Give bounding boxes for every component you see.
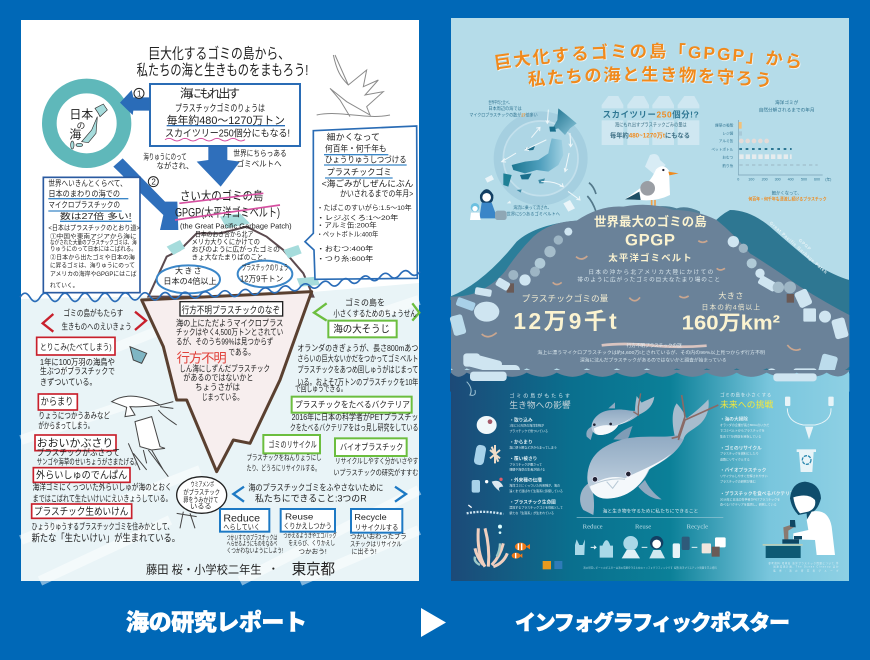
callout: decomposition years: ・ペットボトル:400年 <box>317 230 379 239</box>
section: effects on living things: とりこみ(たべてしまう) <box>40 342 112 352</box>
section: effects on living things: 珊瑚や海草の生長が妨げる <box>509 466 545 471</box>
callout: microplastics around Japan: 日本のまわりの海での <box>48 189 120 199</box>
section: effects on living things: ゴミの島がもたらす <box>63 307 124 318</box>
heading: world's largest garbage island: 帯のように広がったゴミの巨大なたまり場のこと <box>577 275 720 283</box>
text: what GPGP is: 日本のおき合から北ア <box>195 230 253 239</box>
chart: years to decompose: レジ袋 <box>722 131 734 136</box>
callout: microplastics around Japan: りゅうにのって日本にはこばれる。 <box>50 245 137 253</box>
iceberg: top <box>148 213 320 297</box>
section: challenges for the future: 道路にリサイクルする <box>720 456 750 461</box>
iceberg: underwater part with text: るが、そのうち99%は見つからず <box>176 335 274 346</box>
text: credits <box>768 561 839 572</box>
chart: years to decompose: 100 <box>748 178 754 182</box>
iceberg: underwater part with text: である。 <box>228 347 255 357</box>
section: effects on living things: 外らいしゅのでんぱん <box>36 469 127 481</box>
chart: years to decompose: 400 <box>788 178 794 182</box>
section: challenges for the future <box>247 297 419 477</box>
section: 3R icons: 海の研究レポートのポスターは海の環境を守るためのインフォグラフィックです 協賛:海洋プラスチック問題を学ぶ資料 <box>583 566 717 570</box>
debris along slopes <box>449 228 849 384</box>
callout: microplastics around Japan <box>43 177 140 293</box>
section: 3R: Reuse <box>285 511 314 521</box>
callout: decomposition years: 細かくなって <box>327 131 380 142</box>
section: effects on living things: ・取り込み <box>509 416 533 423</box>
label: Great Pacific Garbage Patch: GPGP <box>798 238 812 252</box>
panel: infographic poster <box>450 18 850 581</box>
text: skytree amount: 海にもれ出すプラスチックごみの量は <box>615 122 687 129</box>
section: 3R: スチックはリサイクル <box>350 540 402 548</box>
section: effects on living things: 生ぶつがプラスチックで <box>40 365 115 376</box>
section: effects on living things: プラスチックがふさって <box>37 447 120 458</box>
chart: years to decompose: 自然分解されるまでの年月 <box>759 107 815 114</box>
heading: 私たちの海と生きものをまもろう! <box>137 62 308 79</box>
upper half of drawing <box>43 44 417 297</box>
chart: years to decompose: 釣り糸 <box>722 163 734 168</box>
poster upper section <box>469 42 832 274</box>
section: 3R: つかおう! <box>298 547 327 555</box>
icon: seagull <box>625 154 679 214</box>
text: 27 times microplastics: 日本周辺の海では <box>488 105 522 112</box>
heading: biggest garbage island: (the Great Pacific Garbage Patch) <box>180 221 292 230</box>
section: 3R: Recycle <box>354 512 387 522</box>
section: challenges for the future: いる。およそ7万トンのプラスチックを10年 <box>297 376 419 387</box>
teal slope behind mountain <box>650 210 849 380</box>
chart: years to decompose: 200 <box>762 178 768 182</box>
callout: microplastics around Japan: アメリカの海岸やGPGPにはこば <box>50 270 137 278</box>
section: effects on living things <box>32 307 180 545</box>
small dolphin <box>586 393 654 440</box>
callout: plastic amount <box>150 84 300 146</box>
section: effects on living things: まではこばれて生たいけいにえいきょうしている。 <box>33 493 172 504</box>
section: effects on living things: ひょうりゅうするプラスチックゴミを住みかとして、 <box>32 520 173 531</box>
callout: decomposition years: ・たばこのすいがら:1.5～10年 <box>317 203 412 212</box>
panel: hand-drawn ocean research report <box>20 20 420 581</box>
section: challenges for the future: 未来への挑戦 <box>720 398 774 409</box>
callout: microplastics around Japan: れていく。 <box>50 283 78 290</box>
heading: world's largest garbage island <box>577 214 720 283</box>
section: challenges for the future: リサイクルしやすく分かいさやす <box>335 456 418 465</box>
big dolphin <box>580 395 718 515</box>
icon: magnifier ring with Japan: の <box>77 120 85 130</box>
poster bottom: sea section <box>451 370 849 581</box>
section: effects on living things: ・プラスチック生命圏 <box>509 498 556 505</box>
chart: years to decompose: 300 <box>775 178 781 182</box>
callout: microplastics around Japan: 数は27倍 多い! <box>60 211 132 221</box>
text: what GPGP is: きょ大なたまりばのこと。 <box>192 252 270 261</box>
section: 3R icons: Recycle <box>687 524 708 531</box>
section: challenges for the future: ・ゴミのリサイクル <box>720 444 762 451</box>
section: challenges for the future: ゴミの島を小さくする <box>720 392 772 399</box>
section: effects on living things: 漁に使う網などがからまってしまう <box>509 444 557 449</box>
heading: biggest garbage island: GPGP(太平洋ゴミベルト) <box>175 205 280 220</box>
section: effects on living things: プラスチックで傷ついている <box>509 428 548 433</box>
step number 1: 1 <box>137 89 142 98</box>
badge: plastic amount <box>238 261 292 287</box>
section: challenges for the future: プラスチックをねんりょうにし <box>247 453 322 462</box>
section: challenges for the future: で回しゅうできる。 <box>295 384 347 394</box>
text: what GPGP is <box>192 230 280 261</box>
chart: years to decompose: 何百年・何千年も漂流し続けるプラスチック <box>748 196 827 203</box>
section: challenges for the future: 海の大そうじ <box>333 322 390 335</box>
stat: size: 大きさ <box>718 291 743 301</box>
illustration: scientist with microscope <box>763 482 835 558</box>
callout: microplastics around Japan: <日本はプラスチックのとおり道> <box>48 223 140 232</box>
arrow: report to poster <box>421 608 446 637</box>
callout: decomposition years: <海ごみがしぜんにぶん <box>322 178 414 189</box>
section: challenges for the future: さらいの巨大ないかだをつかってゴミベルト <box>297 353 418 364</box>
heading: world's largest garbage island: 太平洋ゴミベルト <box>608 252 692 263</box>
iceberg: underwater part with text: チックはやく4,500万トンとされてい <box>176 327 283 337</box>
lower half of drawing <box>20 271 420 578</box>
callout: decomposition years: ・おむつ:400年 <box>317 244 374 253</box>
note: ocean current <box>143 148 287 170</box>
iceberg: underwater part with text <box>142 292 312 472</box>
callout: microplastics around Japan: に昇るゴミは、海りゅうにのって <box>50 261 135 269</box>
badge: size: 大きさ <box>175 265 202 275</box>
badge: plastic amount: プラスチックのりょう <box>242 263 288 272</box>
text: what GPGP is: おびのように広がったゴミの <box>192 244 280 253</box>
heading: 巨大化するゴミの島から、 <box>148 44 290 62</box>
iceberg: underwater part with text: ちょうさがは <box>195 381 240 392</box>
icon: recycle bin <box>797 449 816 472</box>
speech bubble: がプラスチック <box>183 487 220 496</box>
section: challenges for the future: たり、どうろにリサイクルする。 <box>247 464 320 473</box>
text: missing plastic: 行方不明プラスチックの謎 <box>627 342 682 349</box>
text: missing plastic <box>537 342 766 364</box>
section: challenges for the future: プラスチックの研究が進む <box>720 478 756 483</box>
crescent moons <box>482 241 801 350</box>
mountain body <box>451 205 849 372</box>
section: challenges for the future: ・プラスチックを食べるバクテリア <box>720 490 795 497</box>
text: credits: 参考資料:環境省 海洋プラスチック問題について 等 <box>768 561 839 565</box>
section: effects on living things: 海洋ゴミにくっついた外来種が、海の <box>509 483 560 488</box>
pale sea background <box>21 283 419 581</box>
section: challenges for the future: 2016年に日本の科学者がPETプラスチッ <box>292 411 418 422</box>
section: challenges for the future: 食べるバクテリアを発見し、研究している <box>720 502 777 507</box>
iceberg: underwater part with text: じまっている。 <box>202 392 243 402</box>
section: effects on living things: がからまってしまう。 <box>38 419 93 430</box>
callout: decomposition years: ・つり糸:600年 <box>317 254 374 263</box>
section: effects on living things: ・覆い被さり <box>509 455 537 462</box>
chart: years to decompose: 細かくなって、 <box>772 189 802 196</box>
text: carried by currents: 世界に5つあるゴミベルトへ <box>507 210 561 217</box>
section: 3R: リサイクルする <box>355 523 398 532</box>
text: missing plastic: 海上に漂うマイクロプラスチックは約4,600万tとされているが、その内の99%以上見つからず行方不明 <box>537 349 766 356</box>
section: challenges for the future: ゴミのリサイクル <box>268 438 317 449</box>
callout: microplastics around Japan: マイクロプラスチックの <box>48 201 120 210</box>
mound under seagull <box>600 205 700 233</box>
section: 3R: をえらび、くりかえし <box>288 539 335 547</box>
section: 3R: 海のプラスチックゴミをふやさないために <box>248 482 383 493</box>
heading: world's largest garbage island: 日本の沖から北アメリカ大陸にかけての <box>588 268 714 276</box>
sketch: fish skeleton <box>317 55 390 117</box>
callout: decomposition years: 何百年・何千年も <box>325 143 387 154</box>
callout: decomposition years: ・アルミ缶:200年 <box>317 220 377 229</box>
bottles: skytree 250 <box>601 96 700 145</box>
section: challenges for the future: ・バイオプラスチック <box>720 467 767 474</box>
heading: biggest garbage island: さい大のゴミの島 <box>180 188 263 203</box>
illustration: dolphins with nets <box>580 393 718 515</box>
icon: ocean cleanup device <box>785 397 834 439</box>
section: 3R: Reduce <box>223 514 260 525</box>
section: 3R: つかえるようきやエコバッグ <box>283 530 337 539</box>
speech bubble: 卵をうみかけて <box>183 495 218 504</box>
section: 3R: 私たちにできること:3つのR <box>255 493 367 503</box>
section: 3R: へらせるようにものをなるべ <box>227 540 277 548</box>
text: what GPGP is: メリカ大りくにかけての <box>192 237 260 246</box>
mountain bottom edge <box>451 370 849 377</box>
chart: years to decompose: (年) <box>825 177 831 182</box>
section: 3R: に出そう! <box>352 546 377 555</box>
callout: microplastics around Japan: 世界へいきんとくらべて、 <box>48 178 127 188</box>
section: challenges for the future: 集めて7万t回収を目指している <box>720 433 761 438</box>
iceberg: underwater part with text: 行方不明 <box>177 351 227 366</box>
section: effects on living things <box>509 392 571 515</box>
iceberg: underwater part with text: しん海にしずんだプラスチック <box>179 363 270 374</box>
signature <box>146 561 335 578</box>
text: credits: 監修:海の研究者グループ <box>773 568 839 572</box>
text: credits: 国連環境計画、The Ocean Cleanup ほか <box>773 565 839 569</box>
bottom label: infographic poster: インフォグラフィックポスター <box>515 611 790 635</box>
callout: plastic amount: プラスチックゴミのりょうは <box>175 103 265 115</box>
callout: decomposition years: ・レジぶくろ:1～20年 <box>317 213 399 222</box>
text: 27 times microplastics: 世界平均と比べ、 <box>488 99 512 106</box>
speech bubble <box>177 477 227 513</box>
illustration: coral and fish <box>475 525 530 567</box>
callout: plastic amount: スカイツリー250個分にもなる! <box>165 128 290 140</box>
chart: years to decompose: 500 <box>801 178 807 182</box>
icons: effects <box>467 416 503 514</box>
signature: ・ <box>268 565 278 576</box>
iceberg: underwater part with text: があるのではないかと <box>183 372 253 383</box>
section: effects on living things: りょうにつかうあみなど <box>38 410 110 420</box>
heading: world's largest garbage island: 世界最大のゴミの島 <box>594 214 707 229</box>
chart: years to decompose: ペットボトル <box>711 147 734 152</box>
section: challenges for the future: プラスチックをたべるバクテリア <box>295 400 410 410</box>
section: effects on living things: 生きものへのえいきょう <box>62 320 132 331</box>
section: effects on living things: 漂流するプラスチックゴミを住処として <box>509 505 563 510</box>
arrow: down to GPGP <box>197 147 240 187</box>
bottom label: ocean research report: 海の研究レポート <box>126 609 307 635</box>
speech bubble: いるる <box>190 503 212 511</box>
text: carried by currents: 海流に乗って流され、 <box>513 204 552 211</box>
section: challenges for the future: オランダのきぎょうが、長さ800mあつ <box>297 342 418 353</box>
section: challenges for the future: プラスチックを燃料にしたり <box>720 451 759 456</box>
section: effects on living things: サンゴや海草のせいちょうがさまたげる。 <box>37 457 140 467</box>
section: effects on living things: ゴミの島がもたらす <box>509 392 571 399</box>
section: challenges for the future: 小さくするためのちょうせん <box>333 309 417 319</box>
step number 1 <box>134 88 144 98</box>
text: 27 times microplastics <box>469 99 538 119</box>
section: challenges for the future: プラスチックをあつめ回しゅうがはじまって <box>297 363 418 374</box>
section: challenges for the future: オランダの企業が長さ800mのいかだ <box>720 422 769 427</box>
title: 私たちの海と生き物を守ろう <box>528 66 770 88</box>
section: challenges for the future: 2016年に日本の科学者がPETプラスチックを <box>720 496 780 501</box>
debris on sea edge <box>467 372 817 395</box>
iceberg: underwater part with text: 行方不明プラスチックのなぞ <box>182 304 280 316</box>
section: effects on living things: 海洋ゴミにくっついた外らいしゅが海のとおく <box>33 481 172 492</box>
chart: years to decompose: 0 <box>737 178 739 182</box>
heading: world's largest garbage island: GPGP <box>625 231 675 250</box>
section: effects on living things: ・外来種の伝播 <box>509 476 542 483</box>
badge: plastic amount: 12万9千トン <box>240 274 283 284</box>
section: challenges for the future: ゴミの島を <box>345 297 385 308</box>
caption: what we can do: 海と生き物を守るために私たちにできること <box>603 508 698 515</box>
section: challenges for the future: バイオプラスチック <box>340 442 403 452</box>
text: carried by currents <box>507 204 561 217</box>
section: effects on living things: 生き物への影響 <box>509 399 571 410</box>
title <box>495 42 801 88</box>
callout: microplastics around Japan: ①中国や東南アジアから海に <box>50 232 137 240</box>
note: ocean current: ながされ、 <box>157 160 193 170</box>
wave line <box>20 271 420 301</box>
callout: decomposition years: ひょうりゅうしつづける <box>325 155 407 165</box>
section: 3R <box>220 482 407 555</box>
section: effects on living things: プラスチック生めいけん <box>34 505 128 518</box>
section: effects on living things: プラスチックが覆さって <box>509 461 542 466</box>
section: 3R: くりかえしつかう <box>283 521 332 530</box>
callout: plastic amount: 毎年約480～1270万トン <box>167 113 285 127</box>
stat: plastic amount: プラスチックゴミの量 <box>522 293 609 304</box>
label: Great Pacific Garbage Patch: Great Pacific Garbage Patch <box>769 220 829 275</box>
section: challenges for the future <box>720 392 795 507</box>
title: 巨大化するゴミの島「GPGP」から <box>495 42 801 71</box>
text: skytree amount <box>603 110 699 139</box>
arrow: magnifier to GPGP <box>113 158 178 230</box>
chart: years to decompose: 煙草の吸殻 <box>715 122 734 127</box>
callout: microplastics around Japan: ながされた大量のプラスチックゴミは、海 <box>50 239 137 247</box>
signature: 藤田 桜・小学校二年生 <box>146 562 262 576</box>
badge: size: 日本の4倍以上 <box>163 276 217 286</box>
section: challenges for the future: ・海の大掃除 <box>720 416 748 423</box>
chart: years to decompose <box>711 99 831 203</box>
callout: plastic amount: 海にもれ出す <box>180 86 240 100</box>
callout: decomposition years: かいされるまでの年月> <box>340 188 413 199</box>
section: challenges for the future: でゴミベルトからプラスチックを <box>720 428 765 433</box>
icon: magnifier ring with Japan: 日本 <box>69 107 93 121</box>
chart: years to decompose: 600 <box>814 178 820 182</box>
chart: years to decompose: おむつ <box>722 155 734 160</box>
chart: years to decompose: 海洋ゴミが <box>775 99 799 106</box>
text: missing plastic: 深海に沈んだプラスチックがあるのではないかと調査が始まっている <box>580 357 727 364</box>
section: challenges for the future: リサイクルしやすく分解されやすい <box>720 473 768 478</box>
section: 3R: つかいすてのプラスチックは <box>227 533 278 541</box>
callout: decomposition years: プラスチックゴミ <box>327 166 392 177</box>
iceberg: underwater part with text: 海の上にただようマイクロプラス <box>176 317 283 328</box>
stat: size: 日本の約4倍以上 <box>702 302 760 311</box>
section: 3R icons: Reuse <box>635 524 651 531</box>
icon: magnifier ring with Japan <box>49 86 124 161</box>
section: effects on living things: からまり <box>41 396 73 408</box>
chart: years to decompose: アルミ缶 <box>719 138 734 143</box>
callout: microplastics around Japan: ②日本から出たゴミや日本の海 <box>50 253 135 261</box>
text: skytree amount: スカイツリー250個分!? <box>603 110 699 120</box>
signature: 東京都 <box>292 561 335 578</box>
sketches: bird, seal, squid, coral <box>112 347 197 528</box>
stat: plastic amount <box>513 293 617 334</box>
section: challenges for the future: いプラスチックの研究がすすむ <box>333 468 418 477</box>
heading <box>137 44 308 79</box>
note: ocean current: 世界にちらっある <box>233 148 287 158</box>
section: effects on living things: 新たな「生態系」が生まれている <box>509 510 554 515</box>
badge: size <box>157 265 220 293</box>
stat: plastic amount: 12万9千t <box>513 308 617 334</box>
section: effects on living things: おおいかぶさり <box>37 437 113 450</box>
section: 3R icons: Reduce <box>583 524 603 531</box>
section: 3R: くつかわないようにしよう! <box>227 547 284 555</box>
icon: mother and child <box>470 189 507 220</box>
section: 3R: へらしていく <box>223 522 260 531</box>
step number 2: 2 <box>151 178 156 187</box>
section: effects on living things: 1年に10万匹の海洋生物が <box>509 423 544 428</box>
text: 27 times microplastics: マイクロプラスチックの数が27倍多い <box>469 112 538 119</box>
section: effects on living things: きずついている。 <box>40 377 97 387</box>
heading: biggest garbage island <box>175 188 292 230</box>
section: effects on living things: 1年に100万羽の海鳥や <box>40 356 115 367</box>
section: 3R icons <box>575 517 726 570</box>
note: ocean current: 海りゅうにのって <box>143 151 187 161</box>
section: effects on living things: 新たな「生たいけい」が生まれている。 <box>32 532 180 545</box>
stat: size: 160万km² <box>682 312 780 334</box>
map: Japan in magnifier <box>485 108 596 212</box>
speech bubble: ウミアメンボ <box>191 481 214 489</box>
logos <box>543 561 562 569</box>
section: effects on living things: 遠くまで運ばれて生態系に影響している <box>509 488 563 493</box>
stat: size <box>682 291 780 334</box>
section: challenges for the future: クをたべるバクテリアをはっ見し研究をしている <box>290 422 418 433</box>
arrow: to magnifier <box>120 90 151 115</box>
text: skytree amount: 毎年約480~1270万tにもなる <box>610 130 690 139</box>
icon: magnifier ring with Japan: 海 <box>69 127 81 141</box>
poster middle: garbage island <box>449 205 849 392</box>
section: effects on living things: ・からまり <box>509 438 533 445</box>
note: ocean current: ゴミベルトへ <box>237 159 282 169</box>
section: 3R: つかいおわったプラ <box>350 532 407 540</box>
step number 2 <box>148 177 158 187</box>
callout: decomposition years <box>305 126 417 279</box>
